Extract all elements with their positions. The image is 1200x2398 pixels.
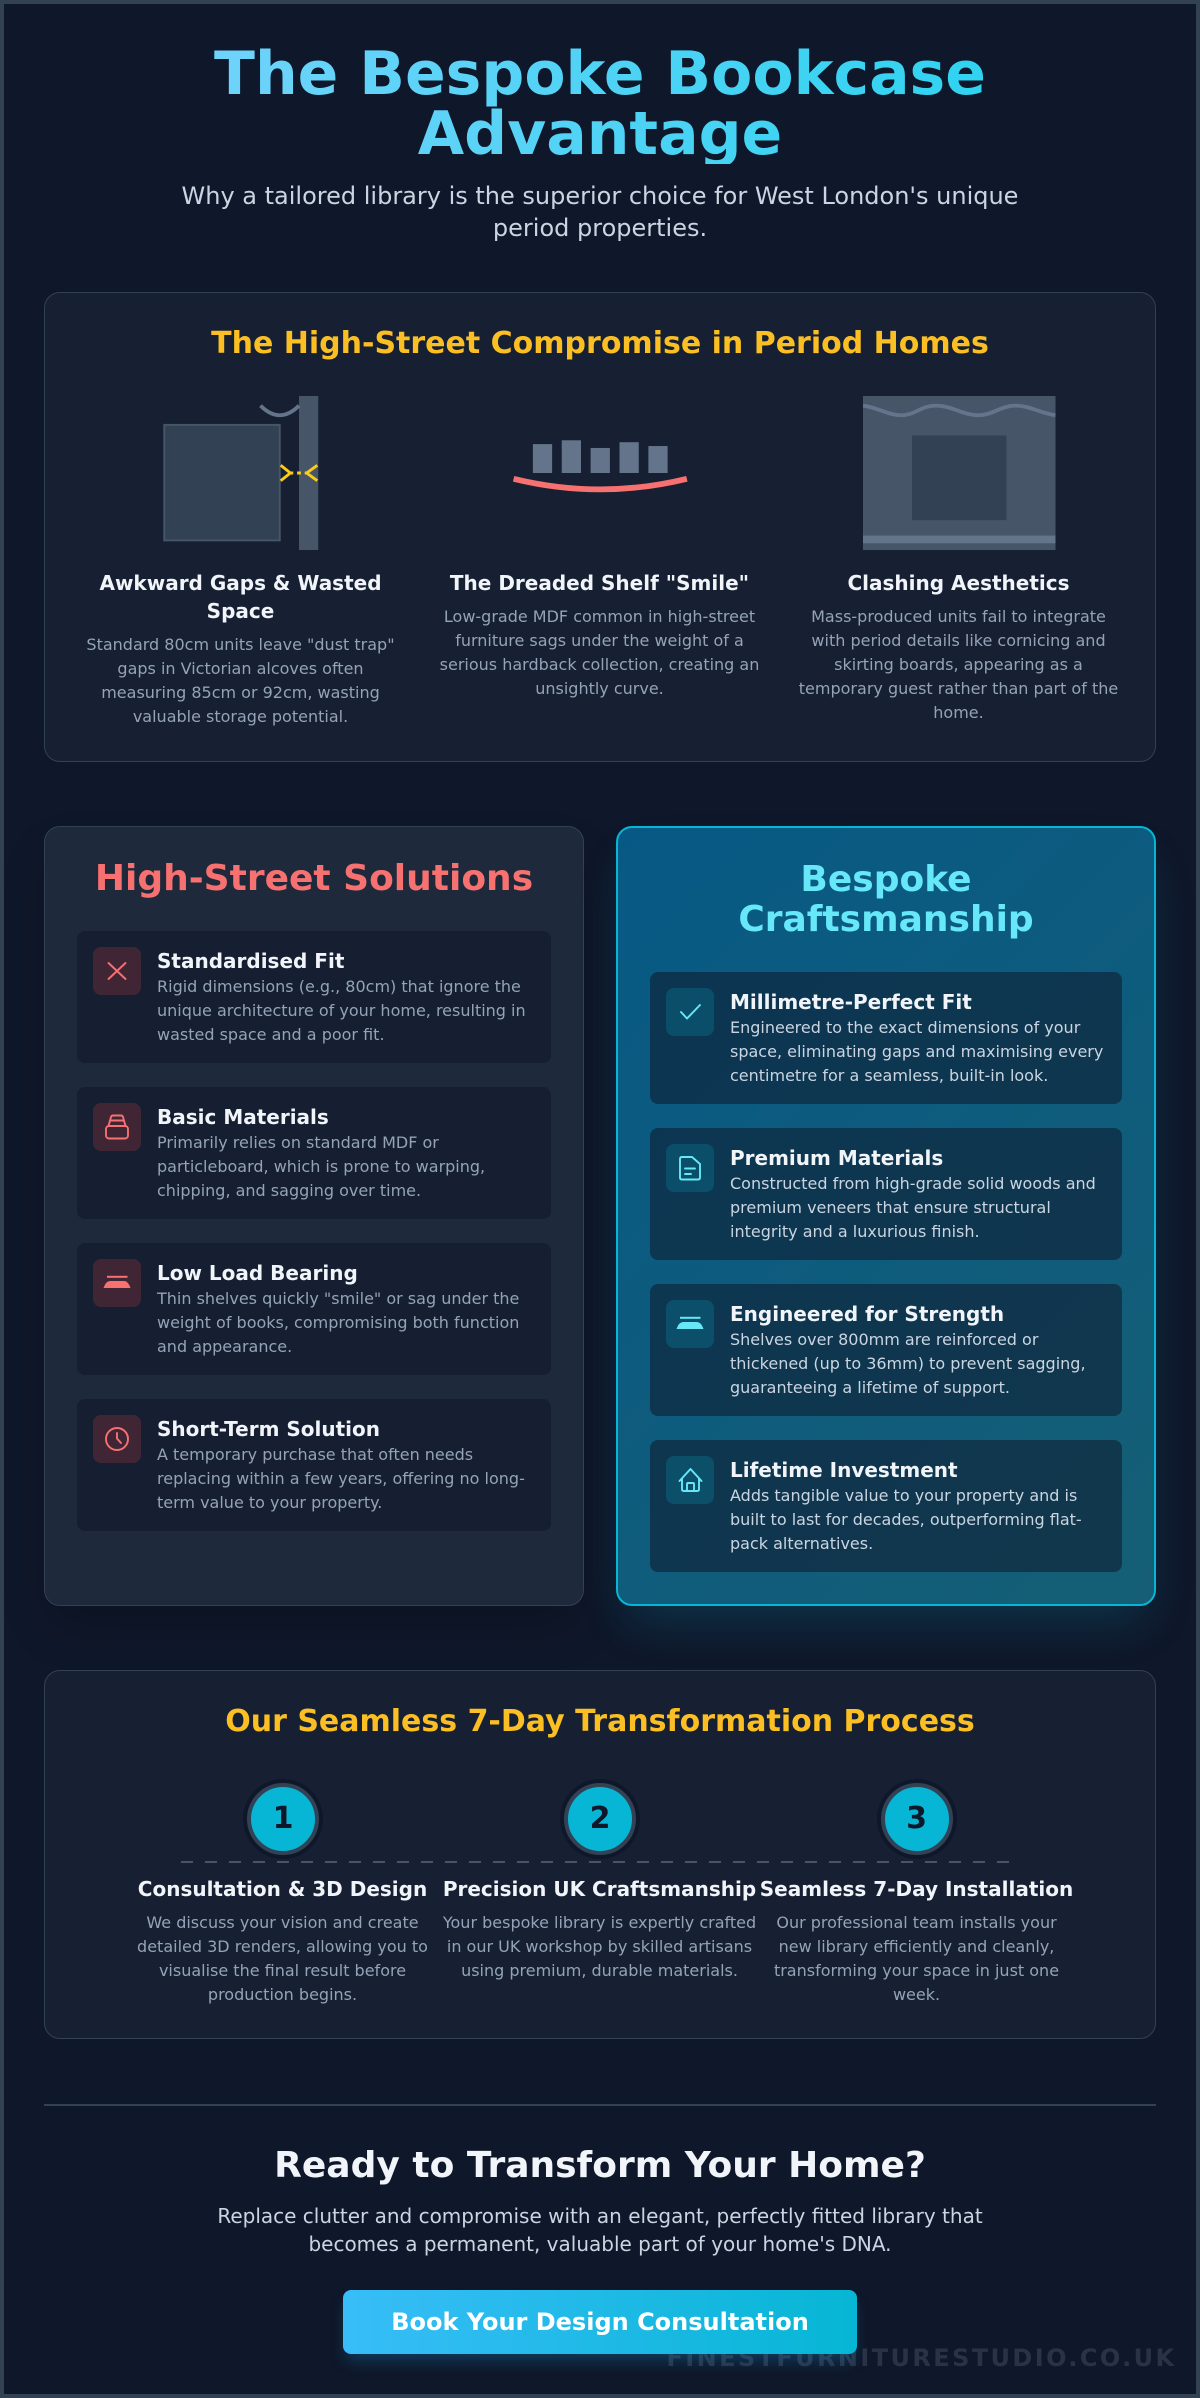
step 3 number [880, 1783, 952, 1855]
title [44, 44, 1156, 164]
text: low load bearing: Low Load Bearing [157, 1261, 358, 1285]
icon: house [666, 1456, 714, 1504]
text: basic materials: particleboard, which is prone to warping, [157, 1157, 485, 1176]
icon: cross [93, 947, 141, 995]
panel: the high-street compromise [44, 292, 1156, 762]
call to action text: Replace clutter and compromise with an elegant, perfectly fitted library that [217, 2204, 983, 2228]
step 1 text [137, 1913, 428, 2004]
text: engineered for strength: Shelves over 800mm are reinforced or [730, 1330, 1038, 1349]
card text: smile: unsightly curve. [535, 679, 664, 698]
step 1 text: detailed 3D renders, allowing you to [137, 1937, 428, 1956]
step 3 text [774, 1913, 1059, 2004]
card text: aesthetics: Mass-produced units fail to integrate [811, 607, 1106, 626]
text: millimetre-perfect fit: centimetre for a seamless, built-in look. [730, 1066, 1048, 1085]
item: standardised fit [77, 931, 551, 1063]
text: standardised fit: Standardised Fit [157, 949, 344, 973]
step 3 text: Our professional team installs your [776, 1913, 1057, 1932]
text: premium materials: premium veneers that ensure structural [730, 1198, 1051, 1217]
item: millimetre-perfect fit [650, 972, 1122, 1104]
title: The Bespoke Bookcase [214, 39, 986, 109]
card title: aesthetics: Clashing Aesthetics [847, 571, 1070, 595]
button: book consultation [343, 2290, 857, 2354]
item: low load bearing [77, 1243, 551, 1375]
card title: gaps: Awkward Gaps & Wasted [99, 571, 382, 595]
step 3 title: Seamless 7-Day Installation [760, 1877, 1073, 1901]
call to action text [217, 2204, 983, 2256]
heading: compromise: The High-Street Compromise in Period Homes [211, 326, 989, 361]
subtitle: period properties. [493, 214, 707, 242]
call to action heading: Ready to Transform Your Home? [274, 2145, 926, 2186]
text: premium materials: Premium Materials [730, 1146, 943, 1170]
text: millimetre-perfect fit: Engineered to the exact dimensions of your [730, 1018, 1080, 1037]
card text: gaps: gaps in Victorian alcoves often [117, 659, 364, 678]
subtitle: Why a tailored library is the superior choice for West London's unique [182, 182, 1018, 210]
icon: awkward gap diagram [163, 396, 318, 550]
text: engineered for strength: Engineered for Strength [730, 1302, 1004, 1326]
text: short-term solution: A temporary purchase that often needs [157, 1445, 473, 1464]
step 1 text: visualise the final result before [159, 1961, 406, 1980]
icon: clock [93, 1415, 141, 1463]
text: standardised fit [157, 949, 526, 1044]
text: basic materials: chipping, and sagging over time. [157, 1181, 421, 1200]
text: basic materials [157, 1105, 485, 1200]
text: standardised fit: wasted space and a poor fit. [157, 1025, 385, 1044]
text: short-term solution: term value to your property. [157, 1493, 382, 1512]
panel: high-street solutions [44, 826, 584, 1606]
card text: gaps [86, 635, 395, 726]
card text: gaps: measuring 85cm or 92cm, wasting [101, 683, 380, 702]
text: premium materials: Constructed from high-grade solid woods and [730, 1174, 1096, 1193]
icon: reinforced shelf [666, 1300, 714, 1348]
watermark: FINESTFURNITURESTUDIO.CO.UK [666, 2344, 1177, 2372]
panel: bespoke craftsmanship [616, 826, 1156, 1606]
card text: gaps: valuable storage potential. [133, 707, 348, 726]
step 2 text: Your bespoke library is expertly crafted [443, 1913, 756, 1932]
card title: gaps: Space [207, 599, 274, 623]
button: book consultation: Book Your Design Consultation [391, 2308, 809, 2336]
step 2 number [564, 1783, 636, 1855]
text: basic materials: Primarily relies on standard MDF or [157, 1133, 439, 1152]
text: basic materials: Basic Materials [157, 1105, 329, 1129]
text: engineered for strength: guaranteeing a lifetime of support. [730, 1378, 1010, 1397]
text: standardised fit: Rigid dimensions (e.g., 80cm) that ignore the [157, 977, 521, 996]
text: engineered for strength: thickened (up to 36mm) to prevent sagging, [730, 1354, 1086, 1373]
step 1 text: production begins. [208, 1985, 357, 2004]
step 2 title: Precision UK Craftsmanship [443, 1877, 756, 1901]
text: short-term solution: Short-Term Solution [157, 1417, 380, 1441]
text: lifetime investment: Lifetime Investment [730, 1458, 958, 1482]
text: millimetre-perfect fit [730, 990, 1103, 1085]
card text: smile: furniture sags under the weight of a [455, 631, 744, 650]
icon: check [666, 988, 714, 1036]
text: engineered for strength [730, 1302, 1086, 1397]
heading: high-street solutions: High-Street Solutions [95, 858, 533, 899]
text: premium materials: integrity and a luxurious finish. [730, 1222, 980, 1241]
icon: sagging shelf [513, 440, 688, 492]
text: standardised fit: unique architecture of your home, resulting in [157, 1001, 526, 1020]
item: premium materials [650, 1128, 1122, 1260]
text: low load bearing: weight of books, compromising both function [157, 1313, 519, 1332]
card title: gaps [99, 571, 382, 623]
card text: aesthetics: home. [933, 703, 984, 722]
item: short-term solution [77, 1399, 551, 1531]
card text: smile: serious hardback collection, creating an [440, 655, 759, 674]
icon: archive [93, 1103, 141, 1151]
heading: bespoke craftsmanship: Craftsmanship [738, 899, 1034, 940]
text: short-term solution [157, 1417, 525, 1512]
step 2 text: using premium, durable materials. [461, 1961, 738, 1980]
card text: aesthetics: with period details like cornicing and [811, 631, 1106, 650]
text: millimetre-perfect fit: Millimetre-Perfect Fit [730, 990, 972, 1014]
card text: aesthetics: temporary guest rather than part of the [799, 679, 1118, 698]
icon: clashing aesthetics [863, 396, 1056, 550]
text: lifetime investment [730, 1458, 1082, 1553]
title: Advantage [418, 99, 782, 169]
heading: bespoke craftsmanship: Bespoke [800, 859, 972, 900]
step 1 text: We discuss your vision and create [146, 1913, 419, 1932]
step 2 number: 2 [590, 1801, 610, 1836]
timeline dashed line [181, 1861, 1009, 1863]
step 1 number: 1 [273, 1801, 293, 1836]
heading: process: Our Seamless 7-Day Transformation Process [225, 1704, 975, 1739]
heading: bespoke craftsmanship [738, 859, 1034, 940]
subtitle [182, 182, 1018, 242]
text: lifetime investment: built to last for decades, outperforming flat- [730, 1510, 1082, 1529]
step 1 number [247, 1783, 319, 1855]
step 3 text: week. [893, 1985, 940, 2004]
call to action text: becomes a permanent, valuable part of your home's DNA. [308, 2232, 892, 2256]
text: short-term solution: replacing within a few years, offering no long- [157, 1469, 525, 1488]
card text: gaps: Standard 80cm units leave "dust trap" [86, 635, 395, 654]
card text: smile: Low-grade MDF common in high-street [444, 607, 755, 626]
card title: smile: The Dreaded Shelf "Smile" [450, 571, 749, 595]
text: low load bearing: and appearance. [157, 1337, 292, 1356]
text: premium materials [730, 1146, 1096, 1241]
text: lifetime investment: Adds tangible value to your property and is [730, 1486, 1077, 1505]
text: millimetre-perfect fit: space, eliminating gaps and maximising every [730, 1042, 1103, 1061]
step 2 text [442, 1913, 756, 1980]
card text: aesthetics: skirting boards, appearing as a [834, 655, 1083, 674]
step 3 number: 3 [906, 1801, 927, 1836]
text: low load bearing [156, 1261, 519, 1356]
step 3 text: new library efficiently and cleanly, [779, 1937, 1054, 1956]
step 1 title: Consultation & 3D Design [138, 1877, 427, 1901]
card text: aesthetics [799, 607, 1118, 722]
step 3 text: transforming your space in just one [774, 1961, 1059, 1980]
step 2 text: in our UK workshop by skilled artisans [447, 1937, 752, 1956]
item: lifetime investment [650, 1440, 1122, 1572]
text: lifetime investment: pack alternatives. [730, 1534, 873, 1553]
icon: document [666, 1144, 714, 1192]
panel: process [44, 1670, 1156, 2039]
text: low load bearing: Thin shelves quickly "smile" or sag under the [157, 1289, 519, 1308]
item: engineered for strength [650, 1284, 1122, 1416]
item: basic materials [77, 1087, 551, 1219]
icon: sagging shelf [93, 1259, 141, 1307]
card text: smile [440, 607, 759, 698]
